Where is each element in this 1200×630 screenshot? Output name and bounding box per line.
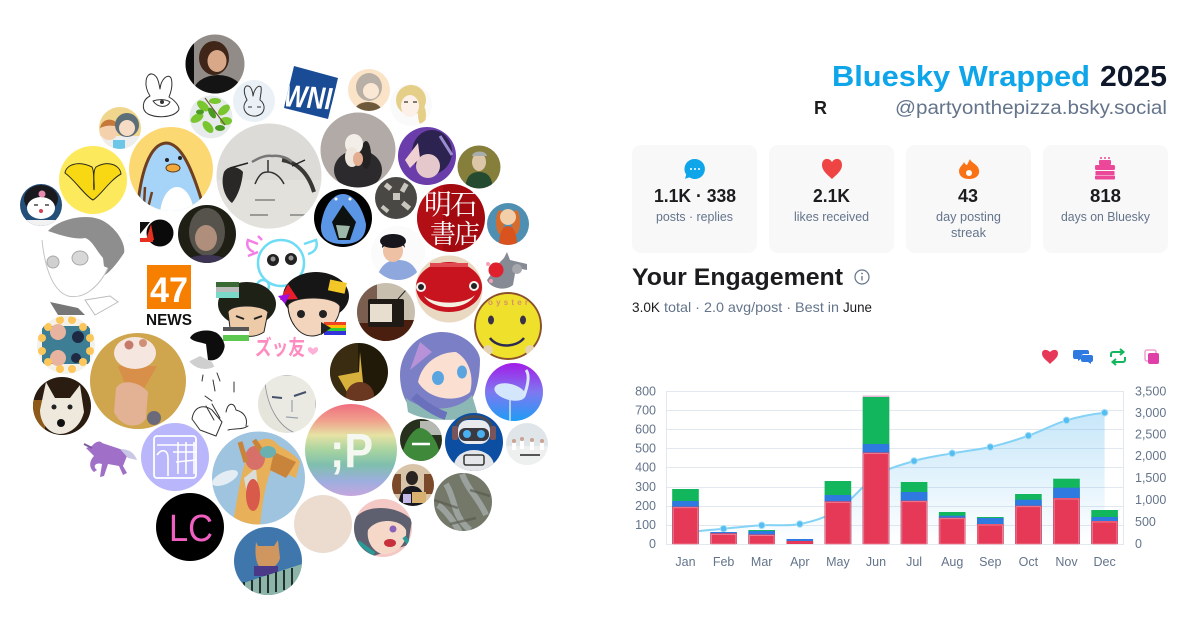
avatar: dark-haired woman	[178, 205, 236, 263]
avatar: blue penguin on black	[314, 189, 372, 247]
sticker: guy with green flag	[216, 282, 276, 341]
avatar: westie dog	[33, 377, 91, 436]
sticker: pink lettering: ズッ友	[255, 336, 305, 360]
logo: 47 NEWS	[146, 265, 192, 329]
avatar: cat on fence	[234, 527, 302, 600]
right axis labels: 1,000	[1135, 493, 1166, 507]
month labels: Feb	[713, 555, 734, 569]
avatar: dark grey sticker	[375, 177, 417, 219]
stat card: day posting streak: streak	[951, 226, 987, 240]
month labels: Jan	[675, 555, 696, 569]
month labels: Dec	[1093, 555, 1116, 569]
stat card: day posting streak	[906, 145, 1031, 253]
legend icon: reposts	[1111, 349, 1125, 365]
chart legend icons	[1042, 349, 1159, 365]
header: title: Bluesky Wrapped	[832, 61, 1090, 93]
avatar: donkey with apple	[486, 252, 527, 289]
left axis labels: 600	[635, 422, 656, 436]
avatar: green leaves	[189, 95, 233, 139]
stat card: likes received: 2.1K	[813, 185, 851, 206]
avatar: woman portrait	[186, 34, 244, 94]
avatar: woman at library	[392, 464, 434, 506]
avatar: rabbit on pale blue	[232, 79, 276, 123]
avatar: rocky water	[434, 473, 492, 532]
avatar: cat face	[216, 123, 322, 230]
avatar: teal-haired anime	[354, 499, 412, 557]
stat card: likes received	[769, 145, 894, 253]
month labels: Sep	[979, 555, 1001, 569]
bar: Apr	[786, 539, 813, 544]
right axis labels: 3,000	[1135, 406, 1166, 420]
engagement summary line: 3.0K	[632, 299, 661, 315]
avatar: ;P rainbow: ;P	[330, 425, 373, 478]
avatar: pale group photo	[506, 423, 548, 466]
avatar: ice cream	[90, 333, 186, 429]
stat card: posts and replies: 1.1K · 338	[654, 185, 736, 206]
right axis labels	[1135, 384, 1166, 551]
avatar: axolotl	[247, 236, 317, 292]
month labels	[675, 555, 1116, 569]
logo: 47 NEWS: NEWS	[146, 312, 192, 329]
avatar: giraffe statue	[210, 431, 306, 526]
stat card: days on Bluesky	[1043, 145, 1168, 253]
month labels: Mar	[751, 555, 772, 569]
left axis labels: 400	[635, 460, 656, 474]
avatar: woman holding white dog	[320, 112, 396, 190]
legend icon: replies	[1073, 350, 1093, 364]
avatar: grey-haired anime	[348, 69, 390, 111]
avatar: lavender seal	[141, 423, 209, 491]
right axis labels: 1,500	[1135, 471, 1166, 485]
avatar: anime duo	[98, 106, 142, 150]
month labels: Jun	[866, 555, 886, 569]
left axis labels	[635, 384, 656, 551]
avatar: Akashi bookstore	[417, 183, 485, 252]
avatar: LC pink on black: LC	[169, 508, 213, 550]
right axis labels: 2,000	[1135, 449, 1166, 463]
sticker: curly-haired guy	[278, 272, 349, 336]
stat card: days on Bluesky: days on Bluesky	[1061, 210, 1151, 224]
icon: info	[855, 270, 869, 284]
bar: Mar	[748, 530, 775, 544]
avatar: blue penguin on yellow	[129, 127, 213, 211]
avatar: green tree monster	[400, 419, 442, 462]
avatar: blonde anime	[396, 85, 426, 124]
stat card: day posting streak: 43	[958, 185, 978, 206]
month labels: Nov	[1055, 555, 1078, 569]
right axis labels: 500	[1135, 515, 1156, 529]
left axis labels: 200	[635, 499, 656, 513]
avatar: LC pink on black	[156, 493, 224, 561]
avatar: rabbit sketch	[143, 74, 179, 117]
stat card: likes received: likes received	[794, 210, 869, 224]
heading: Your Engagement: Your Engagement	[632, 264, 843, 291]
avatar: kuromi	[20, 184, 62, 228]
left axis labels: 800	[635, 384, 656, 398]
chart gridlines	[666, 391, 1124, 545]
avatar: purple unicorn	[84, 442, 137, 477]
legend icon: likes	[1042, 350, 1058, 364]
avatar: old man on olive	[457, 145, 501, 189]
avatar: robot with headphones	[445, 413, 503, 471]
bar: Jan	[672, 489, 699, 544]
header: title: 2025	[1100, 61, 1167, 93]
right axis labels: 0	[1135, 537, 1142, 551]
bar: May	[825, 481, 851, 544]
month labels: Apr	[790, 555, 810, 569]
engagement summary line: June	[843, 299, 872, 315]
right axis labels: 2,500	[1135, 428, 1166, 442]
logo: WNI: WNI	[283, 78, 334, 117]
header: handle: @partyonthepizza.bsky.social	[895, 98, 1167, 119]
avatar: smiling man	[379, 234, 417, 280]
month labels: Oct	[1019, 555, 1039, 569]
left axis labels: 100	[635, 518, 656, 532]
right axis labels: 3,500	[1135, 384, 1166, 398]
avatar: blue-haired anime girl	[400, 332, 480, 420]
avatar: purple anime	[398, 127, 456, 185]
bar: Dec	[1091, 510, 1118, 544]
stat card: posts and replies	[632, 145, 757, 253]
avatar: red puppet	[415, 255, 483, 323]
avatar: Asuka	[487, 203, 529, 246]
avatar: flamingo	[485, 363, 543, 422]
avatar: 4 logo	[140, 220, 174, 246]
bar: Oct	[1015, 494, 1042, 544]
cumulative area line	[686, 409, 1108, 544]
avatar: tower at dusk	[330, 343, 388, 401]
logo: 47 NEWS: 47	[150, 271, 188, 310]
avatar: yellow ginkgo	[59, 146, 127, 214]
avatar cluster	[20, 34, 548, 600]
left axis labels: 300	[635, 480, 656, 494]
bar: Sep	[977, 517, 1004, 544]
avatar: pale face drawing	[258, 375, 316, 434]
logo: WNI	[280, 66, 340, 119]
avatar: flower eyes	[37, 316, 95, 374]
avatar: oyster smiley	[474, 292, 542, 360]
avatar: handwritten sketch	[192, 373, 248, 436]
bar: Nov	[1053, 479, 1080, 544]
avatar: plain beige	[294, 495, 352, 553]
stacked bars	[672, 396, 1118, 544]
month labels: Jul	[906, 555, 922, 569]
bar: Aug	[939, 512, 966, 544]
avatar: oyster smiley: oyster	[488, 298, 528, 307]
month labels: May	[826, 555, 850, 569]
avatar: ;P rainbow	[305, 404, 397, 496]
header: display name: R	[814, 98, 827, 118]
left axis labels: 500	[635, 442, 656, 456]
month labels: Aug	[941, 555, 963, 569]
avatar: black and white person	[190, 330, 225, 369]
left axis labels: 700	[635, 404, 656, 418]
bar: Jul	[901, 482, 927, 544]
legend icon: quotes	[1145, 350, 1159, 364]
avatar: Akashi bookstore: 書店	[430, 214, 480, 251]
avatar: boy manga sketch	[42, 217, 124, 315]
bar: Feb	[710, 532, 737, 544]
stat card: posts and replies: posts · replies	[656, 210, 733, 224]
engagement summary line: total · 2.0 avg/post · Best in	[664, 299, 839, 315]
stat card: days on Bluesky: 818	[1090, 185, 1121, 206]
chart: monthly engagement	[635, 384, 1166, 569]
left axis labels: 0	[649, 537, 656, 551]
avatar: vintage TV	[357, 283, 415, 342]
stat card: day posting streak: day posting	[936, 210, 1001, 224]
bar: Jun	[863, 396, 889, 544]
avatar: Akashi bookstore: 明石	[424, 183, 478, 223]
